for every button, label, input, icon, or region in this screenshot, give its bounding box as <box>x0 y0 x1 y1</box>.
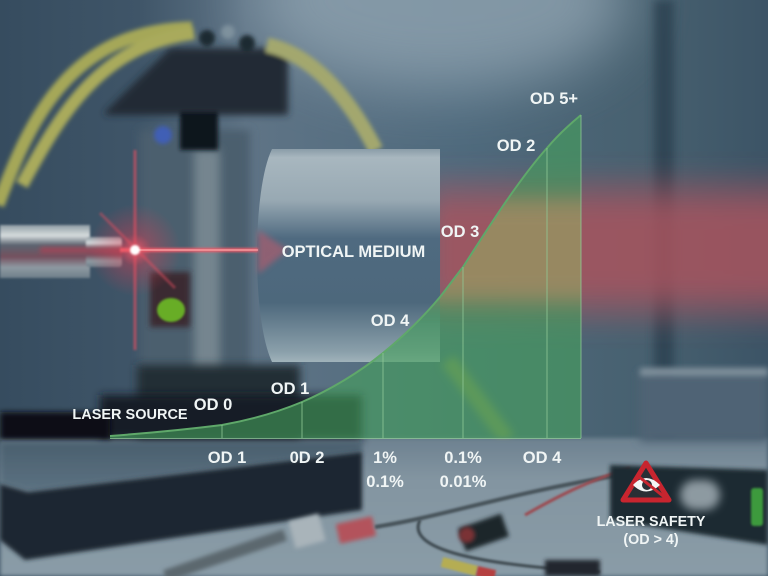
OD curve chart <box>110 114 582 439</box>
axis label: 1% / 0.1%: 0.1% <box>366 473 404 491</box>
background: yellow fibre cables and mount <box>0 25 376 205</box>
area under curve <box>110 115 581 438</box>
axis label: 0.1% / 0.01%: 0.1% <box>444 449 482 467</box>
optical medium cylinder <box>257 149 440 362</box>
curve label: OD 4: OD 4 <box>371 312 410 330</box>
axis label: 1% / 0.1%: 1% <box>373 449 397 467</box>
background: table and dark equipment box <box>0 365 768 576</box>
curve outline <box>110 115 581 436</box>
label: laser source: LASER SOURCE <box>72 407 188 423</box>
red glow entering cylinder <box>258 230 288 274</box>
background: red transmitted beam glow <box>430 165 768 335</box>
axis label: OD 4: OD 4 <box>523 449 562 467</box>
icon: laser safety warning triangle with eye <box>623 463 669 500</box>
curve label: OD 0: OD 0 <box>194 396 232 414</box>
axis label: 0D 2: 0D 2 <box>290 449 324 467</box>
label: laser safety: LASER SAFETY <box>597 514 705 530</box>
baseline and grid lines <box>110 115 581 438</box>
background: yellow diagonal cable behind chart <box>448 360 508 440</box>
amber overlap band <box>430 190 581 311</box>
axis label: 0.1% / 0.01%: 0.01% <box>440 473 487 491</box>
label: laser safety: (OD > 4) <box>623 532 679 548</box>
label: optical medium: OPTICAL MEDIUM <box>282 243 425 261</box>
curve label: OD 3: OD 3 <box>441 223 479 241</box>
laser source barrel <box>0 225 125 278</box>
laser beam and flare <box>89 150 258 350</box>
curve label: OD 5+: OD 5+ <box>530 90 578 108</box>
green indicator light <box>150 272 190 327</box>
curve label: OD 1: OD 1 <box>271 380 309 398</box>
axis label: OD 1: OD 1 <box>208 449 246 467</box>
curve label: OD 2: OD 2 <box>497 137 535 155</box>
